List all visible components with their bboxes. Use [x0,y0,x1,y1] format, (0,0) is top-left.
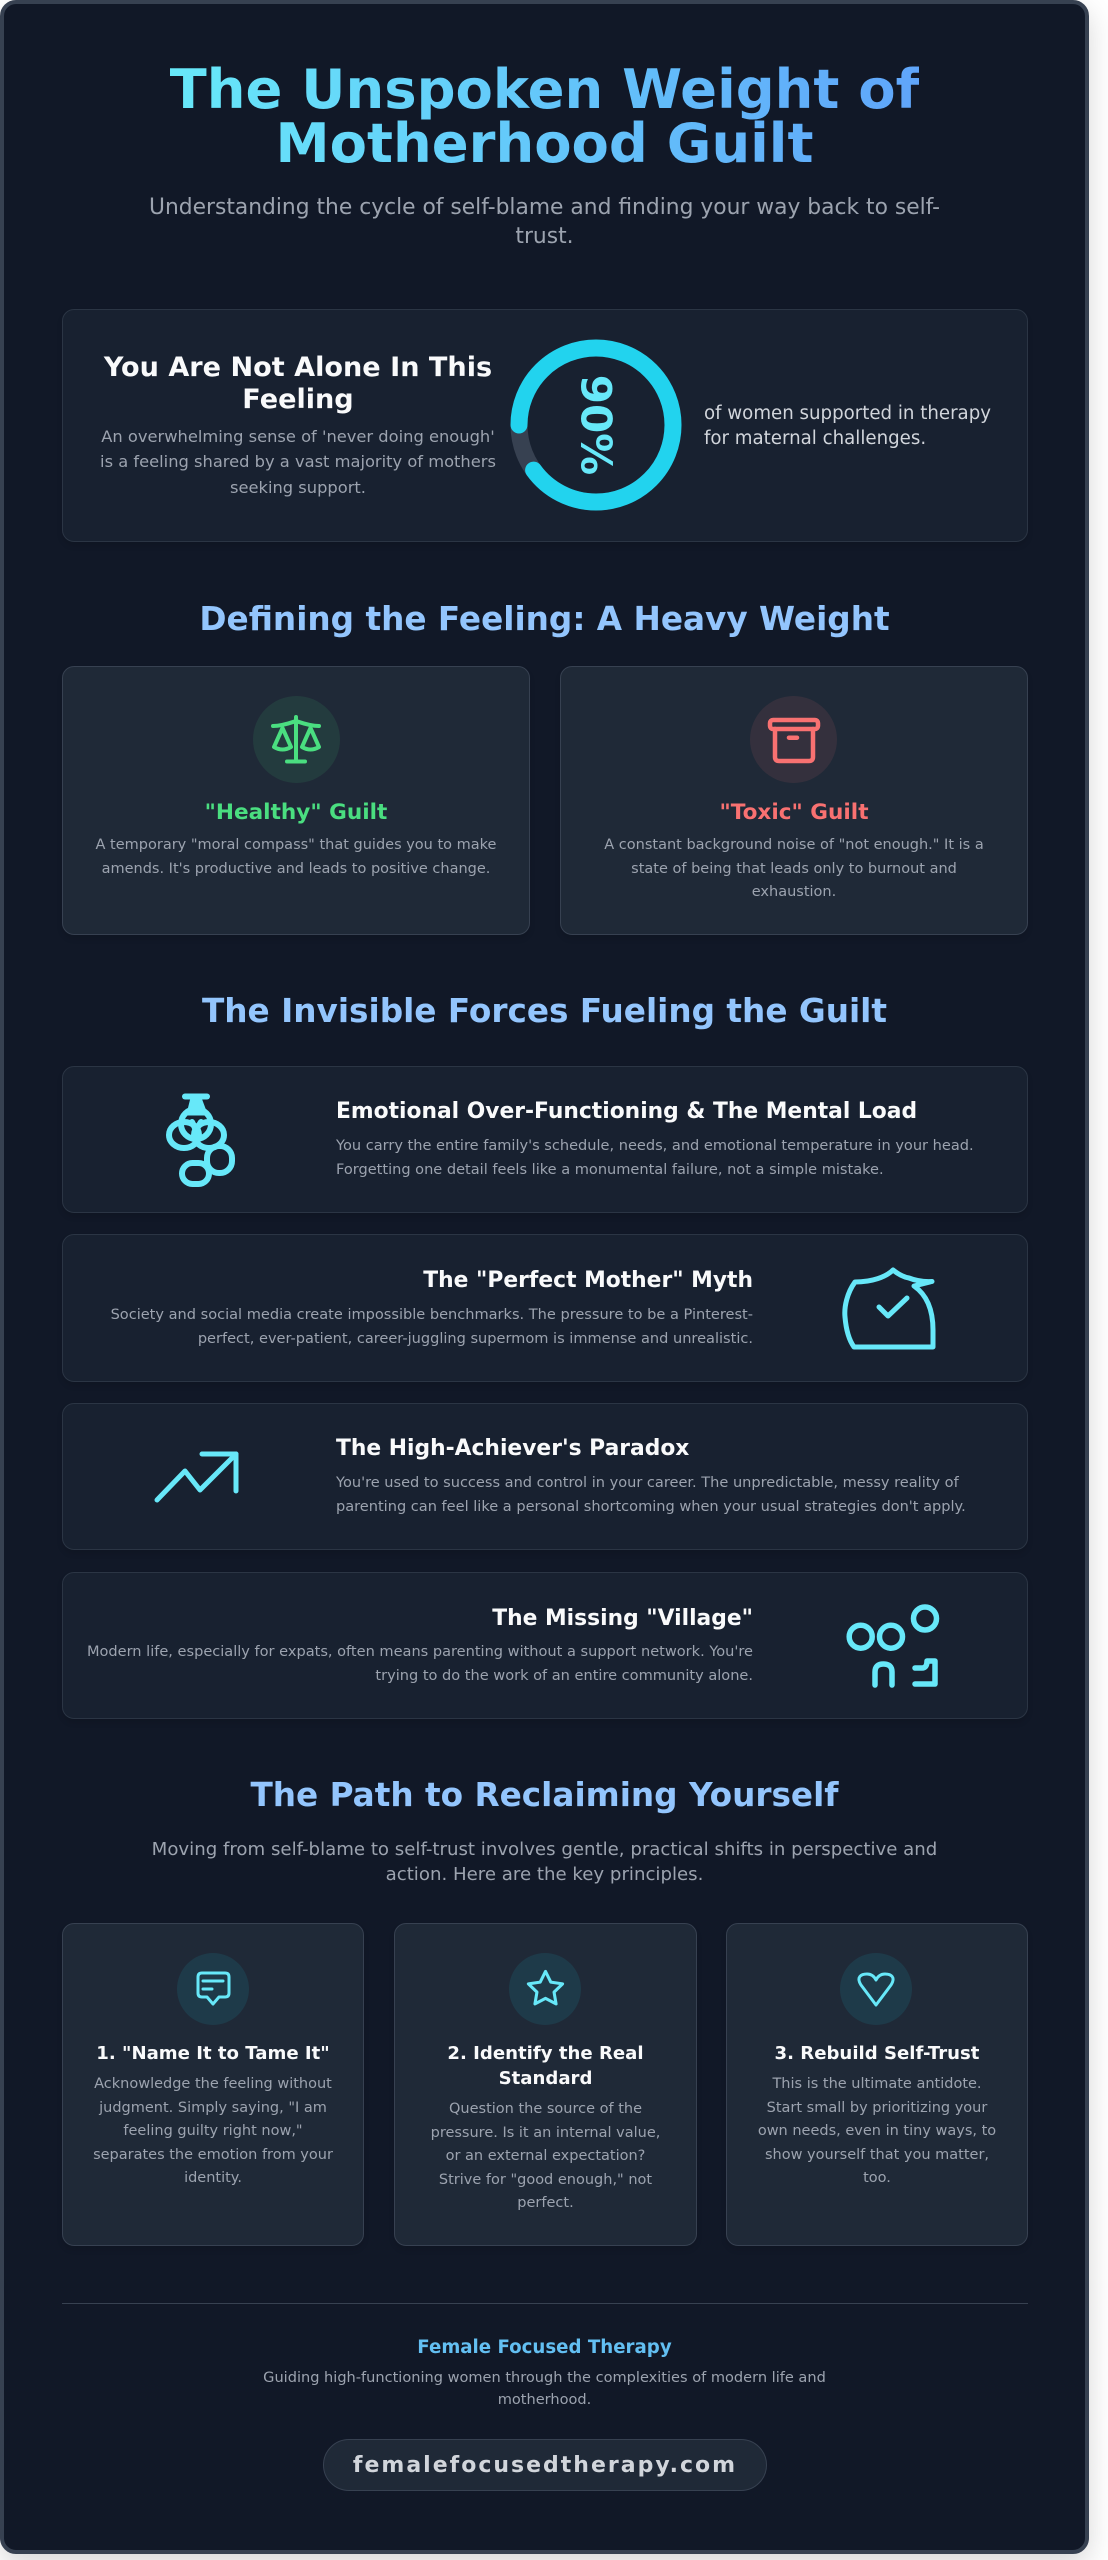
heading: path to reclaiming yourself: The Path to Reclaiming Yourself [250,1776,839,1814]
step 2 title [447,2043,644,2089]
panel: step 3 [726,1923,1028,2246]
force 2 text: Society and social media create impossible benchmarks. The pressure to be a Pinterest- [111,1306,753,1322]
icon: linked rings [166,1094,235,1187]
title: The Unspoken Weight of [170,58,919,121]
step 3 title: 3. Rebuild Self-Trust [775,2043,979,2064]
step 2 title: Standard [499,2068,592,2089]
step 1 text [93,2076,333,2186]
force 3 title: The High-Achiever's Paradox [336,1436,689,1460]
icon: toxic guilt circle [750,696,837,783]
section intro [152,1838,937,1885]
force 3 text: You're used to success and control in your career. The unpredictable, messy reality of [336,1474,959,1491]
panel: missing village [62,1572,1028,1719]
panel: perfect mother myth [62,1234,1028,1382]
stat caption: of women supported in therapy [704,403,991,424]
step 2 text: Strive for "good enough," not [439,2172,652,2188]
force 1 text: You carry the entire family's schedule, needs, and emotional temperature in your head. [336,1136,974,1154]
step 2 title: 2. Identify the Real [447,2043,644,2064]
force 2 text [111,1306,753,1346]
step 1 text: Acknowledge the feeling without [94,2076,332,2092]
icon: heart [857,1972,895,2007]
step 3 text: Start small by prioritizing your [767,2100,987,2116]
donut chart: 90% [510,340,682,510]
step 2 text: or an external expectation? [446,2148,645,2164]
step 2 text: Question the source of the [449,2101,642,2117]
panel: toxic guilt [560,666,1028,935]
stat heading: Feeling [242,384,354,415]
icon: trend arrow [154,1452,238,1502]
heading: invisible forces: The Invisible Forces Fueling the Guilt [202,992,887,1030]
stat caption: for maternal challenges. [704,428,926,449]
stat heading [104,352,492,415]
healthy guilt text: A temporary "moral compass" that guides you to make [96,837,496,853]
title [170,58,919,175]
section intro: Moving from self-blame to self-trust involves gentle, practical shifts in perspective and [152,1838,937,1860]
step 3 text: This is the ultimate antidote. [772,2076,982,2092]
panel: healthy guilt [62,666,530,935]
toxic guilt text [604,837,984,900]
section intro: action. Here are the key principles. [386,1864,703,1885]
footer tagline [263,2369,826,2408]
stat heading: You Are Not Alone In This [104,352,492,383]
title: Motherhood Guilt [276,112,813,175]
donut chart: 90%: 90% [572,375,620,475]
heading: defining the feeling: Defining the Feeling: A Heavy Weight [199,600,890,638]
stat description: seeking support. [230,478,366,497]
stat description [100,427,496,497]
subtitle: trust. [515,224,574,249]
toxic guilt title: "Toxic" Guilt [719,800,869,825]
stat description: is a feeling shared by a vast majority of mothers [100,452,496,471]
step 3 text: show yourself that you matter, [765,2147,989,2163]
icon: healthy guilt circle [253,696,340,783]
toxic guilt text: exhaustion. [752,884,836,900]
toxic guilt text: state of being that leads only to burnout and [631,861,957,877]
stat description: An overwhelming sense of 'never doing enough' [101,427,495,446]
force 1 text [336,1136,974,1178]
icon: scales [271,715,321,764]
footer brand: Female Focused Therapy [417,2337,672,2358]
panel: emotional over-functioning [62,1066,1028,1213]
step 1 text: identity. [184,2170,242,2186]
website pill: femalefocusedtherapy.com [353,2453,737,2478]
step 1 text: judgment. Simply saying, "I am [99,2100,327,2116]
step 2 text: pressure. Is it an internal value, [431,2125,660,2141]
step 2 text: perfect. [517,2195,574,2211]
force 4 title: The Missing "Village" [492,1606,753,1630]
step 3 text: too. [863,2170,891,2186]
icon: archive box [768,718,820,764]
toxic guilt text: A constant background noise of "not enough." It is a [604,837,984,853]
stat caption [704,403,991,449]
force 3 text: parenting can feel like a personal shortcoming when your usual strategies don't apply. [336,1498,966,1515]
force 4 text: trying to do the work of an entire community alone. [375,1667,753,1684]
icon: step 2 circle [509,1953,581,2025]
panel: high-achiever paradox [62,1403,1028,1550]
icon: people community [846,1604,940,1688]
force 4 text [87,1643,753,1684]
healthy guilt text [96,837,496,877]
step 2 text [431,2101,660,2211]
force 1 text: Forgetting one detail feels like a monumental failure, not a simple mistake. [336,1160,884,1178]
footer tagline: Guiding high-functioning women through the complexities of modern life and [263,2369,826,2386]
subtitle: Understanding the cycle of self-blame and finding your way back to self- [149,195,940,220]
footer divider [62,2303,1028,2304]
footer tagline: motherhood. [498,2391,591,2408]
panel: step 1 [62,1923,364,2246]
force 1 title: Emotional Over-Functioning & The Mental Load [336,1099,917,1124]
force 4 text: Modern life, especially for expats, often means parenting without a support network. You're [87,1643,753,1660]
force 3 text [336,1474,966,1515]
icon: star [526,1970,564,2006]
icon: step 1 circle [177,1953,249,2025]
subtitle [149,195,940,249]
healthy guilt text: amends. It's productive and leads to positive change. [102,861,490,877]
step 1 text: feeling guilty right now," [123,2123,303,2139]
website pill [323,2439,767,2491]
panel: you are not alone [62,309,1028,542]
force 2 title: The "Perfect Mother" Myth [423,1268,753,1293]
step 3 text: own needs, even in tiny ways, to [758,2123,996,2139]
force 2 text: perfect, ever-patient, career-juggling supermom is immense and unrealistic. [198,1330,753,1346]
panel: step 2 [394,1923,697,2246]
icon: shield check [842,1267,936,1350]
step 1 text: separates the emotion from your [93,2147,333,2163]
step 1 title: 1. "Name It to Tame It" [96,2043,330,2064]
healthy guilt title: "Healthy" Guilt [205,800,387,825]
icon: step 3 circle [840,1953,912,2025]
step 3 text [758,2076,996,2186]
icon: message [196,1972,230,2006]
